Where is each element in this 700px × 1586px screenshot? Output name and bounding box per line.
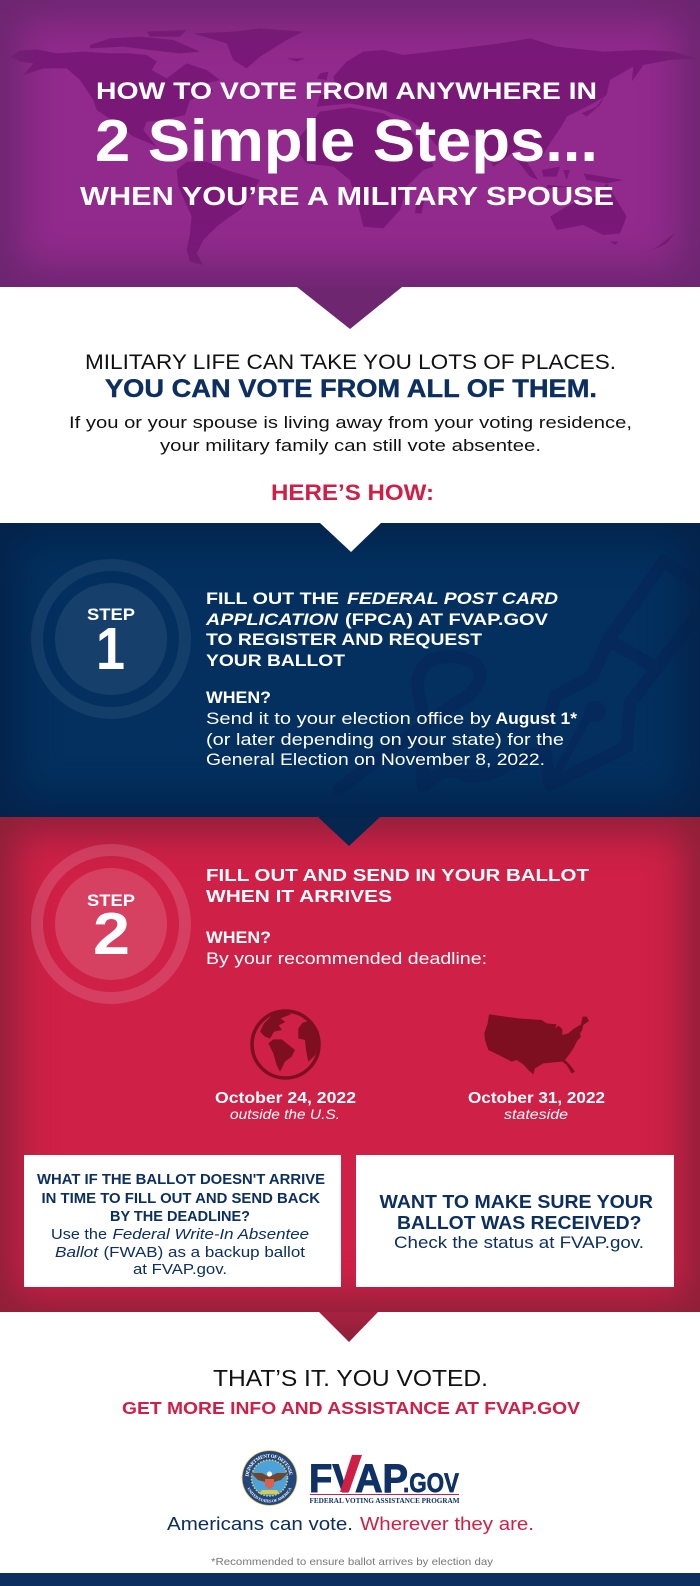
step 2 heading: WHEN IT ARRIVES: [206, 886, 392, 906]
callout: ballot doesn't arrive: BY THE DEADLINE?: [110, 1209, 250, 1225]
step 1 arrow: [318, 817, 380, 846]
deadline: outside the U.S.: October 24, 2022: [215, 1090, 356, 1107]
step 1 badge: [37, 565, 185, 713]
logo: FVAP.gov: FVAP: [309, 1457, 408, 1501]
step 1 heading: TO REGISTER AND REQUEST: [206, 630, 483, 649]
step 2 when text: By your recommended deadline:: [206, 950, 487, 968]
deadline: stateside: October 31, 2022: [468, 1090, 605, 1107]
deadline: outside the U.S.: outside the U.S.: [230, 1106, 340, 1122]
step 2 badge: [37, 850, 185, 998]
step 2 heading: [206, 865, 589, 906]
deadline: outside the U.S.: [215, 1090, 356, 1122]
bottom band: [0, 1573, 700, 1586]
step 1 heading: FEDERAL POST CARD: [347, 589, 558, 608]
intro heading: YOU CAN VOTE FROM ALL OF THEM.: [105, 375, 597, 403]
panel: step 1: [0, 523, 700, 817]
callout: ballot doesn't arrive: Federal Write-In Absentee: [112, 1226, 309, 1243]
step 1 when text: Send it to your election office by: [206, 710, 492, 728]
deadline: stateside: [468, 1090, 605, 1122]
icon: globe: [252, 1011, 319, 1078]
world map: [10, 28, 697, 265]
callout: ballot doesn't arrive: Use the: [51, 1226, 107, 1243]
footnote: *Recommended to ensure ballot arrives by election day: [211, 1556, 494, 1568]
callout: ballot doesn't arrive: Ballot: [55, 1244, 99, 1261]
tagline: Wherever they are.: [360, 1513, 534, 1534]
title: 2 Simple Steps...: [95, 108, 598, 174]
logo: department of defense seal: UNITED STATES OF AMERICA: [248, 1487, 292, 1502]
step 1 when text: (or later depending on your state) for the: [206, 731, 564, 749]
title: [80, 78, 614, 211]
notch from intro section: [320, 523, 381, 552]
step 1 when text: [206, 688, 578, 769]
step 1 heading: APPLICATION: [205, 610, 339, 629]
callout: ballot doesn't arrive: (FWAB) as a backup ballot: [104, 1244, 306, 1261]
closing heading: THAT’S IT. YOU VOTED.: [213, 1365, 488, 1391]
step 1 badge: 1: [96, 616, 125, 682]
callout: ballot doesn't arrive: IN TIME TO FILL OUT AND SEND BACK: [42, 1191, 321, 1207]
callout: ballot doesn't arrive: at FVAP.gov.: [133, 1261, 227, 1278]
step 1 heading: (FPCA) AT FVAP.GOV: [345, 610, 549, 629]
step 1 heading: [205, 589, 558, 670]
panel: step 2: [0, 817, 700, 1312]
step 2 badge: STEP: [87, 891, 135, 910]
step 1 when text: General Election on November 8, 2022.: [206, 751, 545, 769]
step 1 heading: YOUR BALLOT: [206, 651, 346, 670]
callout: make sure ballot was received: BALLOT WAS RECEIVED?: [397, 1212, 642, 1233]
step 1 when text: August 1*: [496, 710, 578, 728]
logo: department of defense seal: DEPARTMENT OF DEFENSE: [245, 1454, 292, 1477]
header arrow: [297, 287, 402, 329]
callout: make sure ballot was received: Check the status at FVAP.gov.: [394, 1233, 644, 1252]
step 2 badge: 2: [93, 901, 130, 967]
logo: FVAP.gov: [309, 1455, 460, 1505]
icon: pen watermark: [338, 562, 700, 790]
logo: department of defense seal: [242, 1450, 298, 1506]
intro text: If you or your spouse is living away from your voting residence,: [69, 414, 632, 432]
step 1 heading: FILL OUT THE: [206, 589, 339, 608]
step 2 heading: FILL OUT AND SEND IN YOUR BALLOT: [206, 865, 589, 885]
logo: FVAP.gov: FEDERAL VOTING ASSISTANCE PROGRAM: [310, 1496, 460, 1505]
title: HOW TO VOTE FROM ANYWHERE IN: [96, 78, 597, 105]
icon: united states map: [484, 1014, 589, 1074]
intro text: [69, 414, 632, 455]
more info link text: GET MORE INFO AND ASSISTANCE AT FVAP.GOV: [122, 1398, 580, 1418]
deadline: stateside: stateside: [504, 1106, 568, 1122]
here's how heading: HERE’S HOW:: [271, 480, 434, 505]
tagline: [167, 1513, 534, 1534]
callout: ballot doesn't arrive: [24, 1155, 341, 1287]
step 2 when text: WHEN?: [206, 928, 271, 947]
step 1 when text: WHEN?: [206, 688, 271, 707]
callout: ballot doesn't arrive: WHAT IF THE BALLOT DOESN'T ARRIVE: [37, 1172, 325, 1188]
title: WHEN YOU’RE A MILITARY SPOUSE: [80, 181, 614, 211]
step 2 when text: [206, 928, 487, 968]
step 2 arrow: [319, 1312, 378, 1342]
intro heading: MILITARY LIFE CAN TAKE YOU LOTS OF PLACES.: [85, 351, 616, 374]
header panel: [0, 0, 700, 287]
callout: make sure ballot was received: WANT TO MAKE SURE YOUR: [380, 1191, 653, 1212]
step 1 badge: STEP: [87, 605, 135, 624]
intro heading: [85, 351, 616, 403]
tagline: Americans can vote.: [167, 1513, 353, 1534]
logo: FVAP.gov: .GOV: [403, 1468, 459, 1498]
intro text: your military family can still vote absentee.: [160, 437, 541, 455]
callout: make sure ballot was received: [356, 1155, 674, 1287]
